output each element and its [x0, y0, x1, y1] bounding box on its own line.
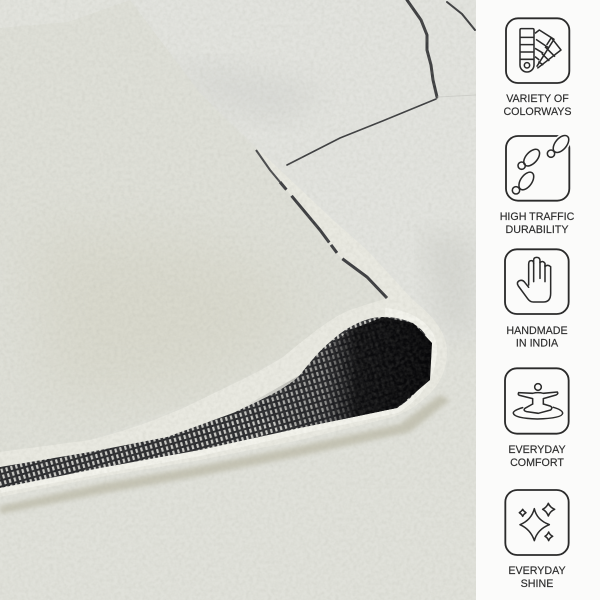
feature: everyday comfort	[505, 368, 569, 469]
photo: folded rug	[0, 0, 476, 600]
icon: colour swatch fan	[506, 18, 569, 83]
label: EVERYDAY	[508, 444, 566, 456]
feature: high traffic durability	[500, 133, 575, 236]
icon: meditating person	[505, 368, 569, 434]
feature: variety of colorways	[503, 18, 572, 118]
feature: handmade in India	[505, 249, 569, 350]
fold edge dark line	[256, 150, 280, 182]
feature: everyday shine	[505, 490, 569, 590]
upper fold face	[0, 0, 387, 452]
icon: footprints	[506, 133, 572, 201]
icon: sparkles	[505, 490, 569, 555]
feature: high traffic durability: DURABILITY	[506, 224, 568, 236]
feature: everyday comfort: COMFORT	[510, 457, 564, 469]
shadow line under fold	[0, 395, 450, 514]
panel: feature sidebar	[476, 0, 600, 600]
feature: everyday shine: SHINE	[521, 578, 553, 590]
feature: handmade in India: IN INDIA	[516, 338, 559, 350]
feature: variety of colorways: COLORWAYS	[503, 106, 572, 118]
label: HANDMADE	[506, 325, 568, 337]
bright binding along the curl edge	[0, 312, 433, 489]
label: EVERYDAY	[508, 565, 566, 577]
label: HIGH TRAFFIC	[500, 211, 575, 223]
knobbly border around the curl and fold edge	[0, 147, 447, 497]
label: VARIETY OF	[506, 93, 569, 105]
texture overlay	[0, 0, 476, 600]
rug surface behind the fold	[130, 0, 476, 340]
curl underside weave	[0, 300, 436, 488]
rug dark pattern lines	[287, 0, 476, 165]
icon: open hand	[505, 249, 569, 314]
